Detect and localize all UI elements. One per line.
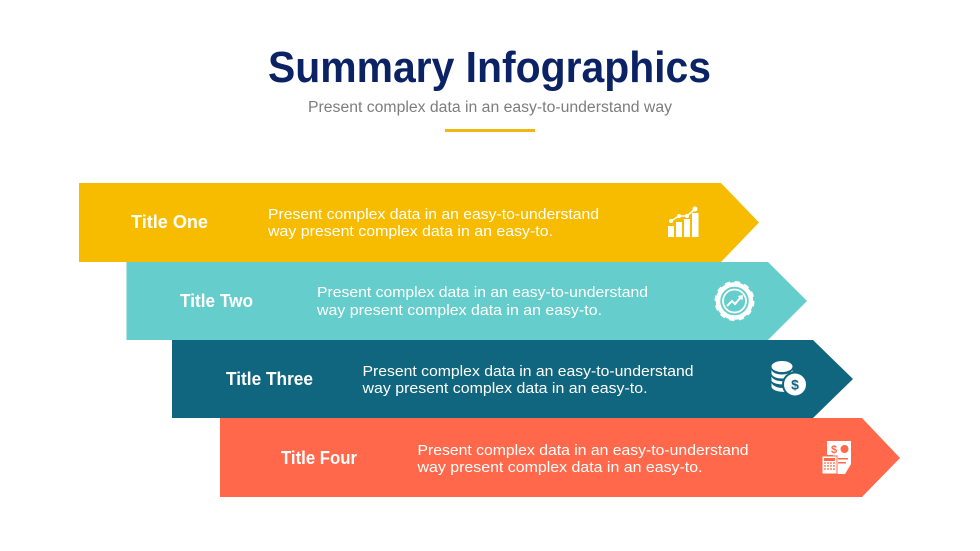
panel: title four arrow — [220, 418, 900, 497]
icon: bar chart with trend line — [668, 206, 698, 237]
subtitle: Present complex data in an easy-to-understand way — [308, 99, 672, 116]
accent underline — [445, 129, 535, 132]
icon: calculator and invoice — [822, 441, 851, 474]
text block: title two description: Present complex data in an easy-to-understand — [317, 284, 648, 301]
heading: title four: Title Four — [281, 447, 357, 468]
text block: title one description: way present complex data in an easy-to. — [267, 223, 553, 240]
icon: calculator and invoice: $ — [831, 444, 837, 456]
heading: title three: Title Three — [226, 368, 313, 389]
text block: title three description: way present complex data in an easy-to. — [361, 380, 648, 397]
text block: title three description: Present complex data in an easy-to-understand — [362, 363, 694, 380]
heading: title one: Title One — [131, 211, 208, 232]
icon: coins with dollar: $ — [791, 376, 799, 392]
panel: title three arrow — [172, 340, 853, 418]
text block: title two description: way present complex data in an easy-to. — [316, 302, 602, 319]
icon: gear with growth arrow — [717, 284, 752, 318]
icon: coins with dollar — [772, 361, 808, 398]
text block: title one description: Present complex data in an easy-to-understand — [268, 206, 599, 223]
title: Summary Infographics — [268, 43, 711, 92]
text block: title four description: way present complex data in an easy-to. — [416, 459, 702, 476]
heading: title two: Title Two — [180, 290, 253, 311]
panel: title one arrow — [79, 183, 759, 262]
panel: title two arrow — [126, 262, 807, 340]
text block: title four description: Present complex data in an easy-to-understand — [418, 442, 748, 459]
